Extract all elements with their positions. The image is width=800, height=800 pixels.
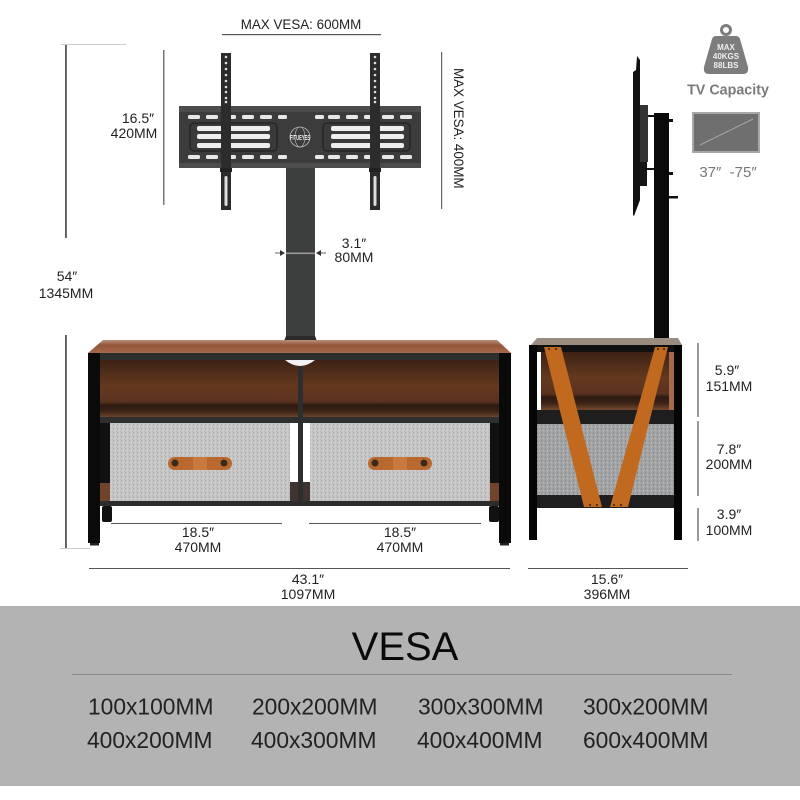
VESA sizes list: 300x300MM (418, 694, 543, 720)
dimension: overall width: 1097MM (281, 586, 335, 602)
dimension: overall width (89, 568, 510, 602)
dimension: mount height: 16.5″ (122, 110, 154, 126)
VESA sizes list: 600x400MM (583, 727, 708, 753)
VESA sizes list: 300x200MM (583, 694, 708, 720)
icon: weight capacity: 40KGS (713, 52, 740, 61)
VESA heading: VESA (352, 625, 459, 669)
icon: weight capacity: 88LBS (714, 61, 739, 70)
orange strap: left (544, 347, 602, 507)
dimension: shelf height: 151MM (706, 378, 752, 394)
TV mount rail: left (220, 53, 232, 210)
TV mount rail: right (369, 53, 381, 210)
dimension: clearance height: 100MM (706, 522, 752, 538)
dimension: drawer width left: 470MM (175, 539, 221, 555)
dimension: drawer height (697, 421, 752, 496)
dimension: post width (275, 235, 373, 265)
dimension: post width: 80MM (335, 249, 373, 265)
dimension: drawer width right (309, 523, 481, 555)
VESA sizes list: 400x200MM (87, 727, 212, 753)
icon: weight capacity (704, 26, 748, 74)
TV stand front view (88, 340, 511, 546)
dimension: overall height: 54″ (57, 268, 77, 284)
logo: FITUEYES globe: FITUEYES (290, 135, 310, 142)
dimension: overall height: 1345MM (39, 285, 93, 301)
TV size range: 37″ -75″ (699, 164, 757, 181)
dimension: side width: 15.6″ (591, 571, 623, 587)
dimension: drawer width right: 470MM (377, 539, 423, 555)
dimension: drawer height: 200MM (706, 456, 752, 472)
fabric drawer: right (310, 423, 490, 501)
dimension: clearance height (697, 506, 752, 541)
dimension: drawer width right: 18.5″ (384, 524, 416, 540)
icon: TV screen (693, 113, 759, 152)
dimension: mount height (111, 50, 164, 205)
side view: TV panel and mount (633, 56, 678, 216)
dimension: side width: 396MM (584, 586, 630, 602)
stand top (88, 340, 511, 353)
dimension: side width (528, 568, 688, 602)
frame bands (88, 353, 511, 360)
dimension: drawer width left (111, 523, 282, 555)
dimension: post width: 3.1″ (342, 235, 366, 251)
VESA sizes list: 200x200MM (252, 694, 377, 720)
dimension: mount height: 420MM (111, 125, 157, 141)
VESA sizes list: 400x300MM (251, 727, 376, 753)
dimension: overall height (39, 44, 126, 549)
icon: weight capacity: MAX (717, 43, 736, 52)
dimension: drawer height: 7.8″ (717, 441, 741, 457)
TV mount post (284, 168, 317, 341)
open shelf (100, 360, 499, 418)
dimension: shelf height (697, 343, 752, 417)
dimension: shelf height: 5.9″ (715, 362, 739, 378)
dimension: clearance height: 3.9″ (717, 506, 741, 522)
lower compartment (100, 423, 500, 503)
logo: FITUEYES globe (290, 127, 310, 147)
VESA sizes list (87, 694, 708, 753)
centre divider (298, 360, 303, 501)
heading: TV Capacity: TV Capacity (687, 82, 769, 98)
panel: VESA sizes (0, 606, 800, 786)
side view: post (654, 113, 669, 345)
dimension: max VESA height: MAX VESA: 400MM (451, 68, 466, 189)
dimension: drawer width left: 18.5″ (182, 524, 214, 540)
dimension: max VESA width: MAX VESA: 600MM (241, 17, 361, 32)
side view: stand (529, 338, 682, 540)
VESA sizes list: 400x400MM (417, 727, 542, 753)
VESA sizes list: 100x100MM (88, 694, 213, 720)
fabric drawer: left (110, 423, 290, 501)
TV mount plate (179, 106, 421, 168)
orange strap: right (610, 347, 668, 507)
dimension: overall width: 43.1″ (292, 571, 324, 587)
legs (88, 353, 100, 543)
